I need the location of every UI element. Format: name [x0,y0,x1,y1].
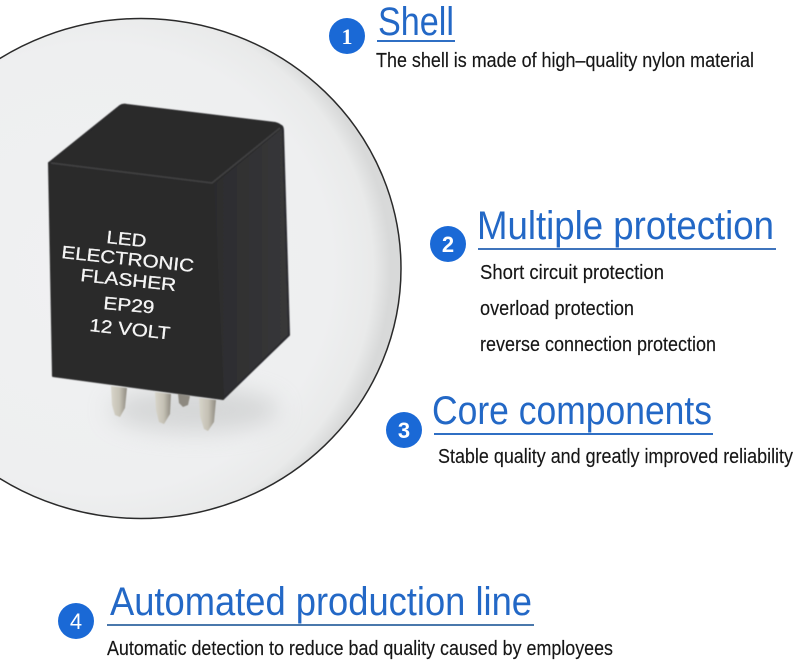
relay front face [49,163,223,399]
text: protection list: overload protection [480,298,634,320]
cast shadow [110,388,280,432]
badge 2 [430,226,466,262]
underline 4 [107,624,534,626]
relay label: FLASHER [80,265,177,295]
underline 2 [478,248,776,250]
section 4: automated production line [58,580,613,660]
circle backdrop [0,18,401,518]
relay edge highlights [51,128,280,183]
badge 1 [329,18,365,54]
underline 1 [377,40,455,42]
underline 3 [434,433,713,435]
relay label: EP29 [103,293,155,317]
badge 3 [386,412,422,448]
section 2: multiple protection [430,204,776,356]
text: shell description: The shell is made of high–quality nylon material [376,50,754,72]
relay label: LED [106,227,147,251]
section 1: shell [329,0,754,72]
icon: flasher relay [49,105,289,431]
badge 3: 3 [398,418,410,443]
heading: core components: Core components [432,389,712,433]
relay label: 12 VOLT [89,315,171,343]
relay label [61,227,195,343]
badge 1: 1 [342,24,352,49]
heading: multiple protection: Multiple protection [477,204,774,248]
relay top face [49,105,281,184]
section 3: core components [386,389,793,468]
pins [111,386,216,431]
heading: automated production line: Automated production line [110,580,532,624]
badge 2: 2 [442,232,454,257]
text: automation description: Automatic detection to reduce bad quality caused by employees [107,638,613,660]
relay right face [213,126,289,399]
text: protection list: Short circuit protection [480,262,664,284]
badge 4 [58,603,94,639]
heading: shell: Shell [378,0,454,44]
badge 4: 4 [70,609,82,634]
text: protection list: reverse connection protection [480,334,716,356]
relay label: ELECTRONIC [61,242,195,276]
product photo circle [0,18,401,518]
text: protection list [480,262,716,356]
